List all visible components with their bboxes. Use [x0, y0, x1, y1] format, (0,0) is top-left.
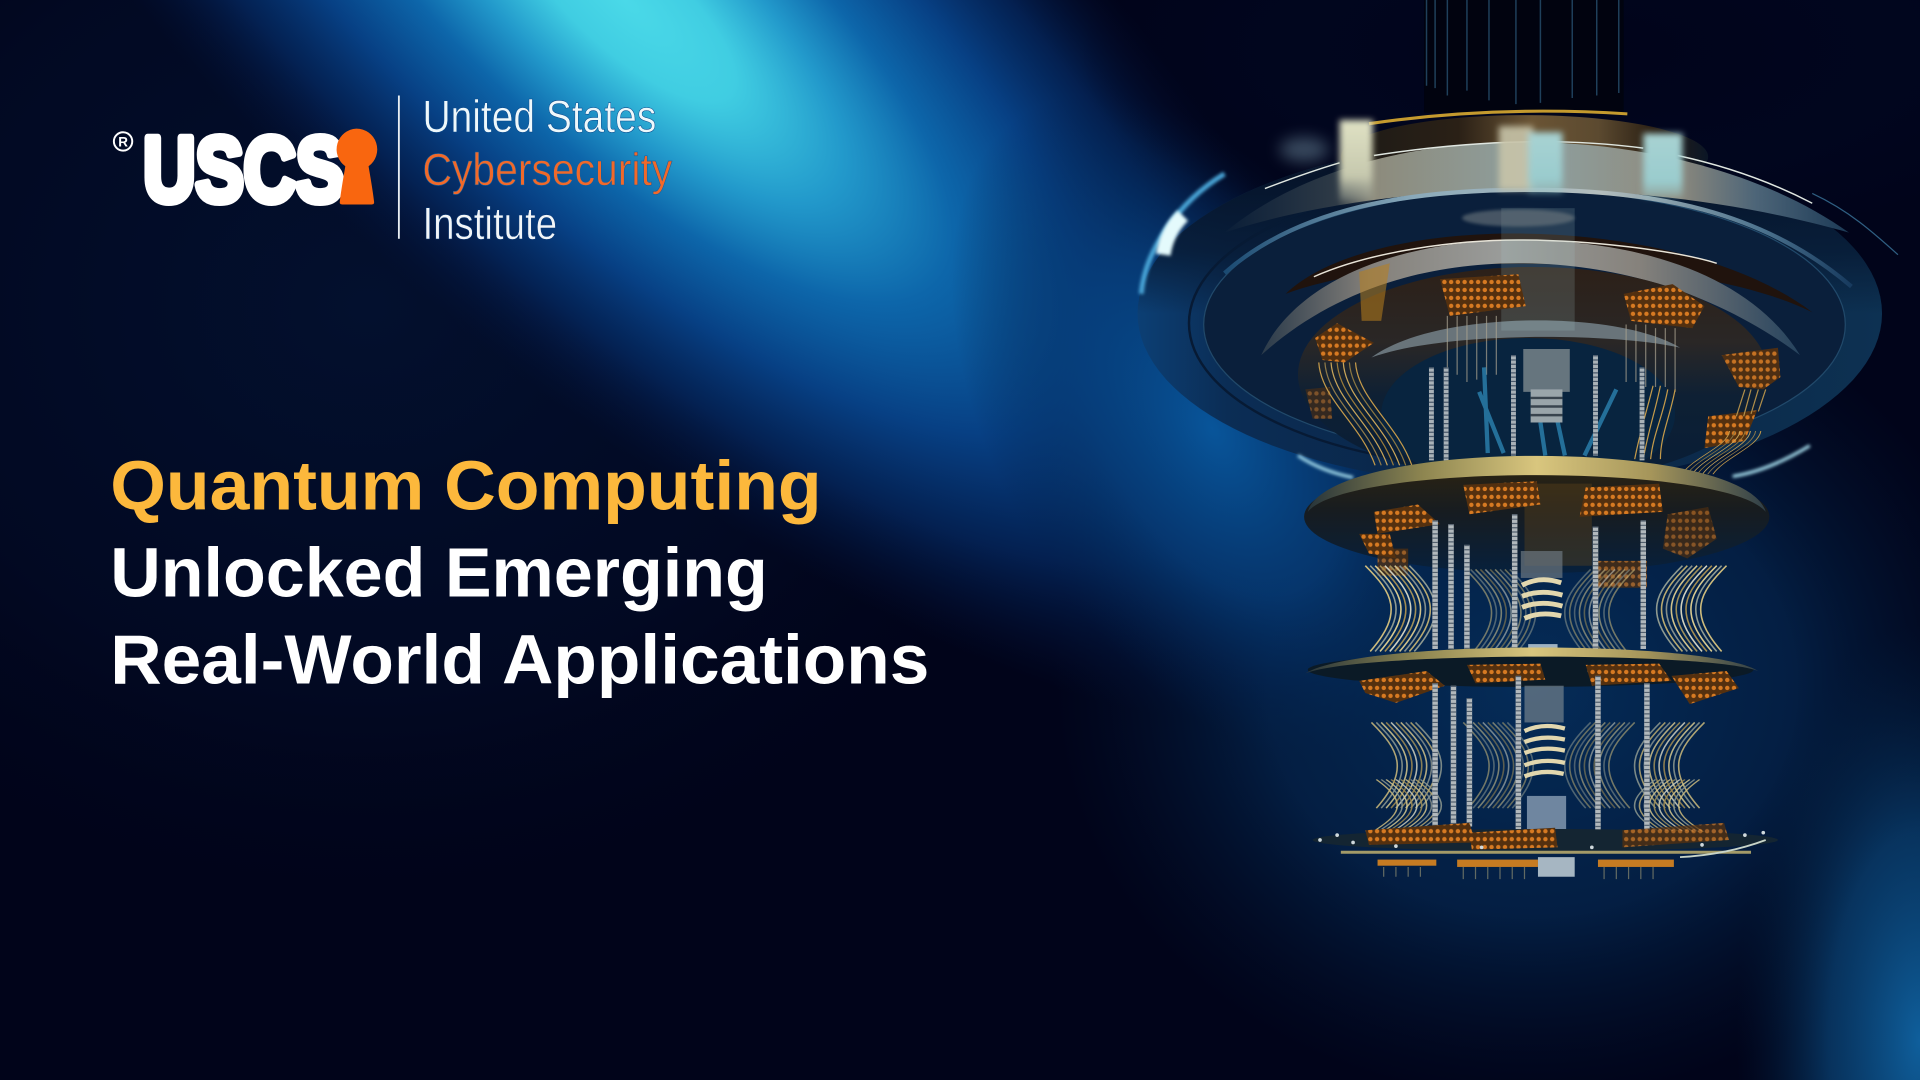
institute name: Cybersecurity [422, 144, 673, 195]
third tier chip arrays [1359, 664, 1739, 704]
base plate with components [1313, 823, 1778, 879]
icon: orange keyhole [337, 129, 377, 204]
institute name: Institute [422, 198, 557, 249]
second tier coil [1521, 551, 1562, 651]
title: Quantum Computing [110, 446, 822, 524]
title: Unlocked Emerging [110, 533, 768, 611]
quantum computer chandelier illustration [1138, 0, 1898, 879]
third tier coil [1524, 686, 1566, 835]
upper brass collar [1341, 111, 1708, 198]
institute name [422, 91, 673, 249]
third tier rods [1435, 676, 1647, 835]
dish rim highlights [1141, 174, 1810, 478]
institute name: United States [422, 91, 656, 142]
top cable bundle [1424, 0, 1624, 113]
inner silver rings and chamber [1261, 208, 1800, 490]
registered mark: R [118, 134, 128, 149]
title: Real-World Applications [110, 620, 929, 698]
title [110, 446, 929, 698]
second tier rods [1435, 514, 1643, 649]
glowing support pillars [1340, 120, 1682, 201]
logo: USCI mark and institute name [114, 91, 673, 249]
second tier chip arrays [1359, 481, 1717, 588]
second tier waisted wiring [1365, 566, 1727, 655]
upper wiring [1319, 316, 1766, 474]
logo divider [398, 96, 400, 239]
third tier gold ring [1305, 647, 1758, 687]
large upper dish [1138, 142, 1898, 485]
upper chip arrays [1305, 274, 1780, 448]
second tier dark disk [1304, 460, 1769, 573]
third tier wiring [1371, 722, 1704, 833]
inner bowl of the dish [1204, 190, 1851, 459]
logo wordmark: USCS [143, 119, 344, 221]
glow haze left of pillars [1280, 137, 1329, 162]
upper silver band [1224, 142, 1849, 233]
registered mark [114, 132, 132, 151]
second tier gold ring [1308, 456, 1766, 512]
upper threaded rods and connector [1431, 349, 1642, 460]
